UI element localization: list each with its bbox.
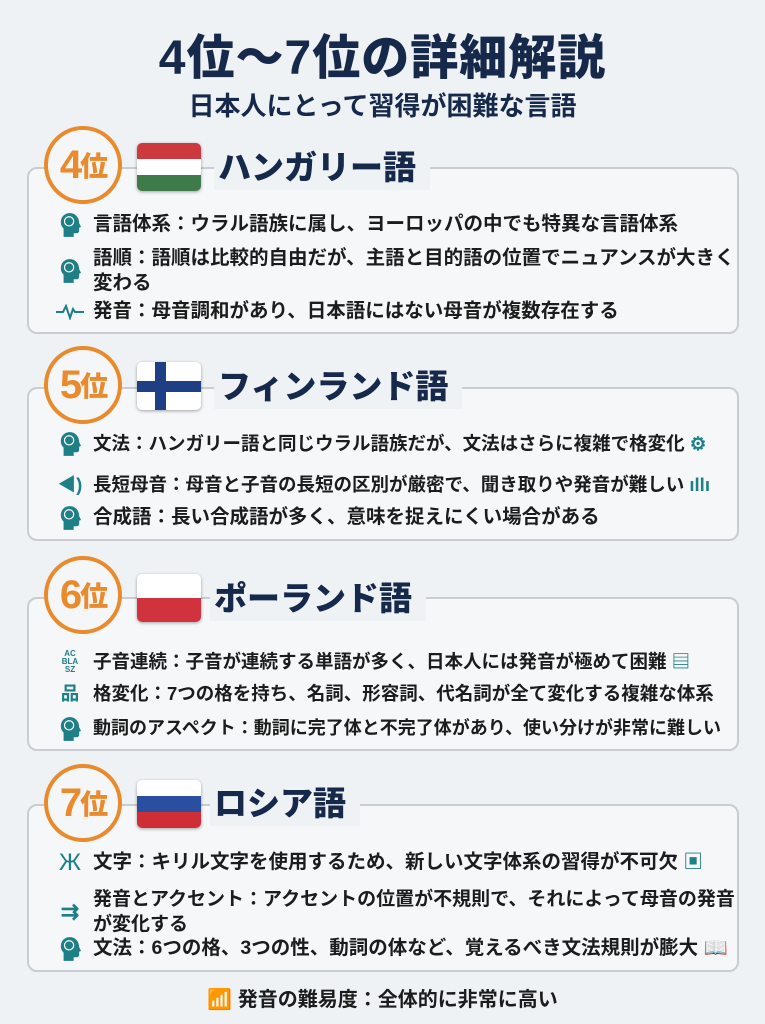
bullet: language family: 言語体系：ウラル語族に属し、ヨーロッパの中でも特異な言語体系 [93,213,678,235]
bullet: consonant clusters: SZ [65,664,75,674]
flag: russia [137,780,201,828]
rank badge 4 [44,126,122,204]
bullet: word order [60,247,735,294]
flag: finland [137,362,201,410]
bullet: script: Ж [59,849,81,876]
heading: russian: ロシア語 [214,785,346,822]
flag: poland [137,574,201,622]
bullet: consonant clusters: AC [64,648,76,658]
bullet: pronunciation: 発音：母音調和があり、日本語にはない母音が複数存在する [93,300,619,322]
bullet: accent: ⇉ [61,899,79,924]
rank badge 5: 位 [80,371,106,402]
panel: russian [27,804,739,972]
bullet: aspect: 動詞のアスペクト：動詞に完了体と不完了体があり、使い分けが非常に難しい [93,718,721,738]
heading: polish: ポーランド語 [214,580,412,617]
flag: hungary [137,143,201,191]
title: 4位〜7位の詳細解説 [159,32,606,85]
bullet: grammar: 文法：6つの格、3つの性、動詞の体など、覚えるべき文法規則が膨大 📖 [93,937,728,959]
bullet: vowel length: 長短母音：母音と子音の長短の区別が厳密で、聞き取りや発音が難しい ıllı [93,474,710,495]
bullet: accent [61,888,735,935]
panel: hungarian [27,167,739,334]
panel: polish [27,597,739,751]
bullet: cases: 格変化：7つの格を持ち、名詞、形容詞、代名詞が全て変化する複雑な体系 [93,683,714,704]
rank badge 6 [44,556,122,634]
rank badge 4: 位 [80,151,106,182]
bullet: accent: 発音とアクセント：アクセントの位置が不規則で、それによって母音の発音 [93,889,735,910]
rank badge 7: 位 [80,789,106,820]
panel: finnish [27,387,739,541]
rank badge 4: 4 [60,142,80,186]
rank badge 7: 7 [60,780,80,824]
bullet: word order: 変わる [93,272,152,294]
bullet: consonant clusters: BLA [62,656,78,666]
rank badge 5 [44,346,122,424]
bullet: vowel length: ◀) [58,474,82,495]
rank badge 7 [44,764,122,842]
rank badge 5: 5 [60,362,80,406]
bullet: script: 文字：キリル文字を使用するため、新しい文字体系の習得が不可欠 ▣ [93,851,703,873]
heading: finnish: フィンランド語 [218,368,448,405]
footer note: 📶 発音の難易度：全体的に非常に高い [207,989,558,1011]
rank badge 6: 位 [80,581,106,612]
bullet: compounds: 合成語：長い合成語が多く、意味を捉えにくい場合がある [93,506,600,528]
bullet: cases: 品 [61,683,79,704]
bullet: grammar: 文法：ハンガリー語と同じウラル語族だが、文法はさらに複雑で格変化 ⚙ [93,433,706,454]
subtitle: 日本人にとって習得が困難な言語 [189,91,576,121]
heading: hungarian: ハンガリー語 [218,149,416,186]
bullet: consonant clusters: 子音連続：子音が連続する単語が多く、日本人には発音が極めて困難 ▤ [93,651,690,672]
bullet: accent: が変化する [93,914,188,935]
bullet: word order: 語順：語順は比較的自由だが、主語と目的語の位置でニュアンスが大きく [93,247,735,269]
rank badge 6: 6 [60,572,80,616]
